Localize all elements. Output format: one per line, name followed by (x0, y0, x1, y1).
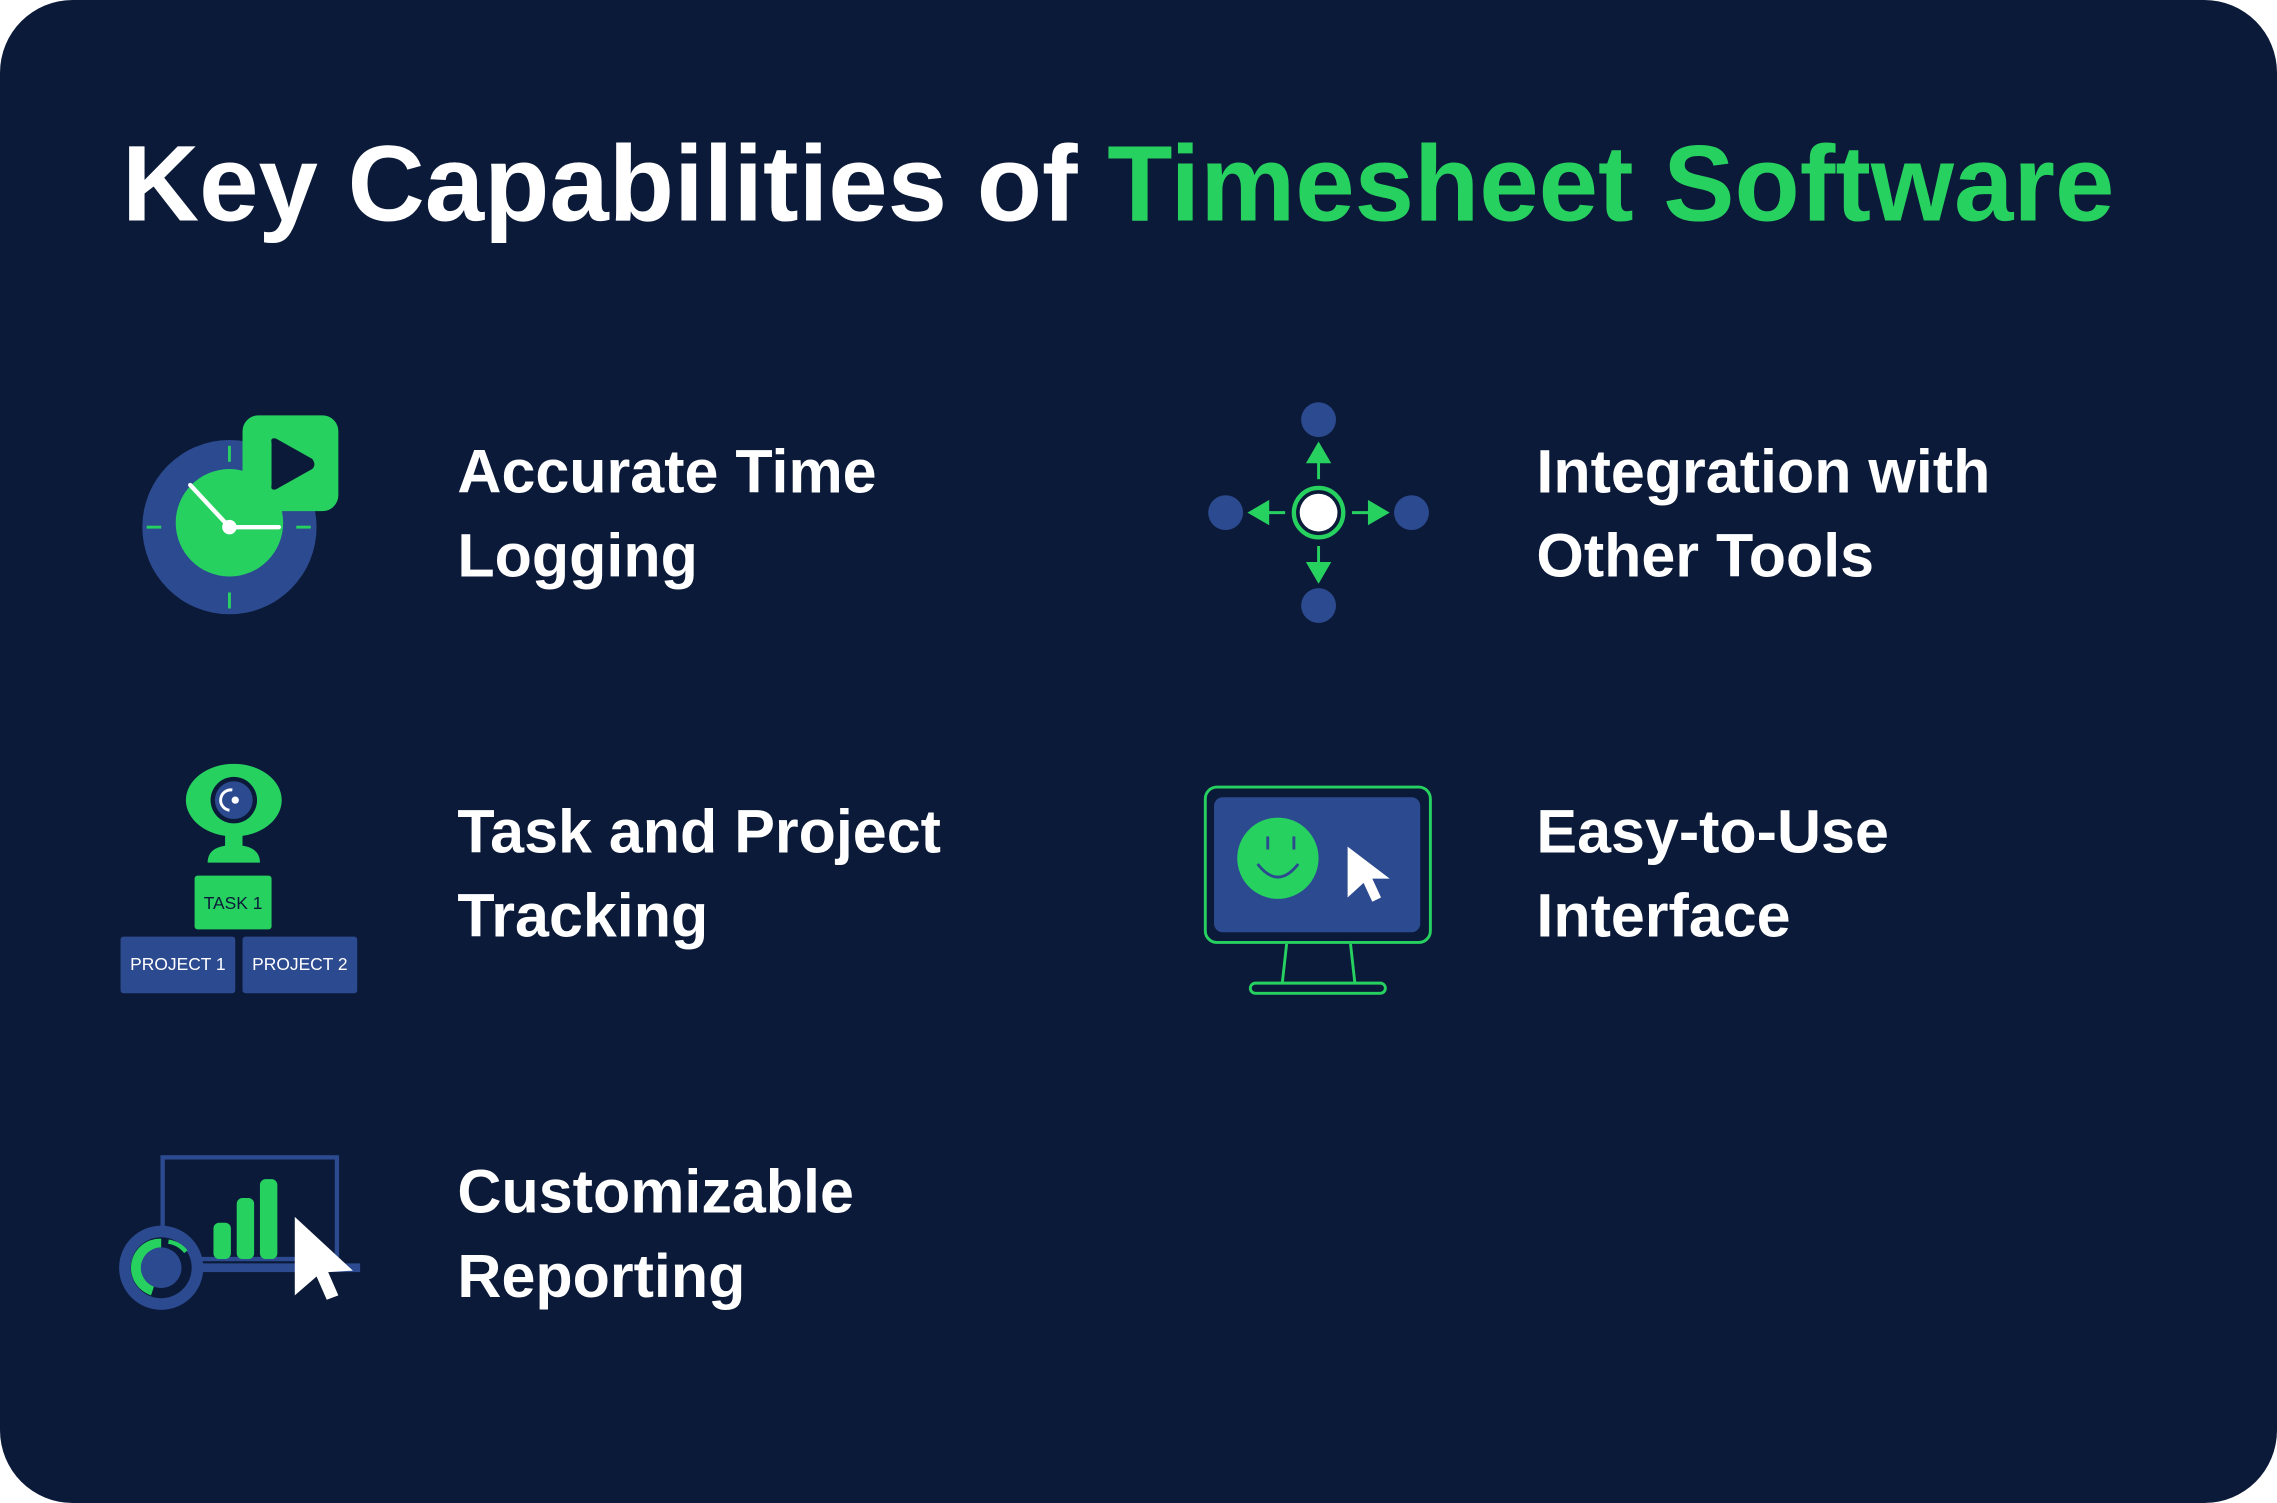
heading: customizable reporting: Reporting (457, 1242, 745, 1310)
heading: task and project tracking: Task and Project (457, 797, 941, 865)
icon: webcam task project (121, 764, 357, 993)
title: Key Capabilities of Timesheet Software (122, 124, 2114, 244)
heading: accurate time logging: Logging (457, 522, 698, 590)
heading: integration with other tools: Other Tools (1536, 522, 1874, 590)
heading: accurate time logging: Accurate Time (457, 437, 877, 505)
heading: easy-to-use interface: Interface (1536, 882, 1791, 950)
heading: customizable reporting: Customizable (457, 1158, 854, 1226)
icon: webcam task project: PROJECT 2 (252, 954, 348, 974)
heading: task and project tracking: Tracking (457, 882, 708, 950)
heading: easy-to-use interface: Easy-to-Use (1536, 797, 1889, 865)
icon: monitor smiley (1205, 787, 1430, 993)
heading: integration with other tools: Integration with (1536, 437, 1990, 505)
icon: integration hub (1208, 402, 1429, 623)
icon: clock with play (142, 415, 338, 614)
icon: webcam task project: PROJECT 1 (130, 954, 226, 974)
icon: reporting laptop (119, 1157, 360, 1310)
icon: webcam task project: TASK 1 (204, 893, 262, 913)
